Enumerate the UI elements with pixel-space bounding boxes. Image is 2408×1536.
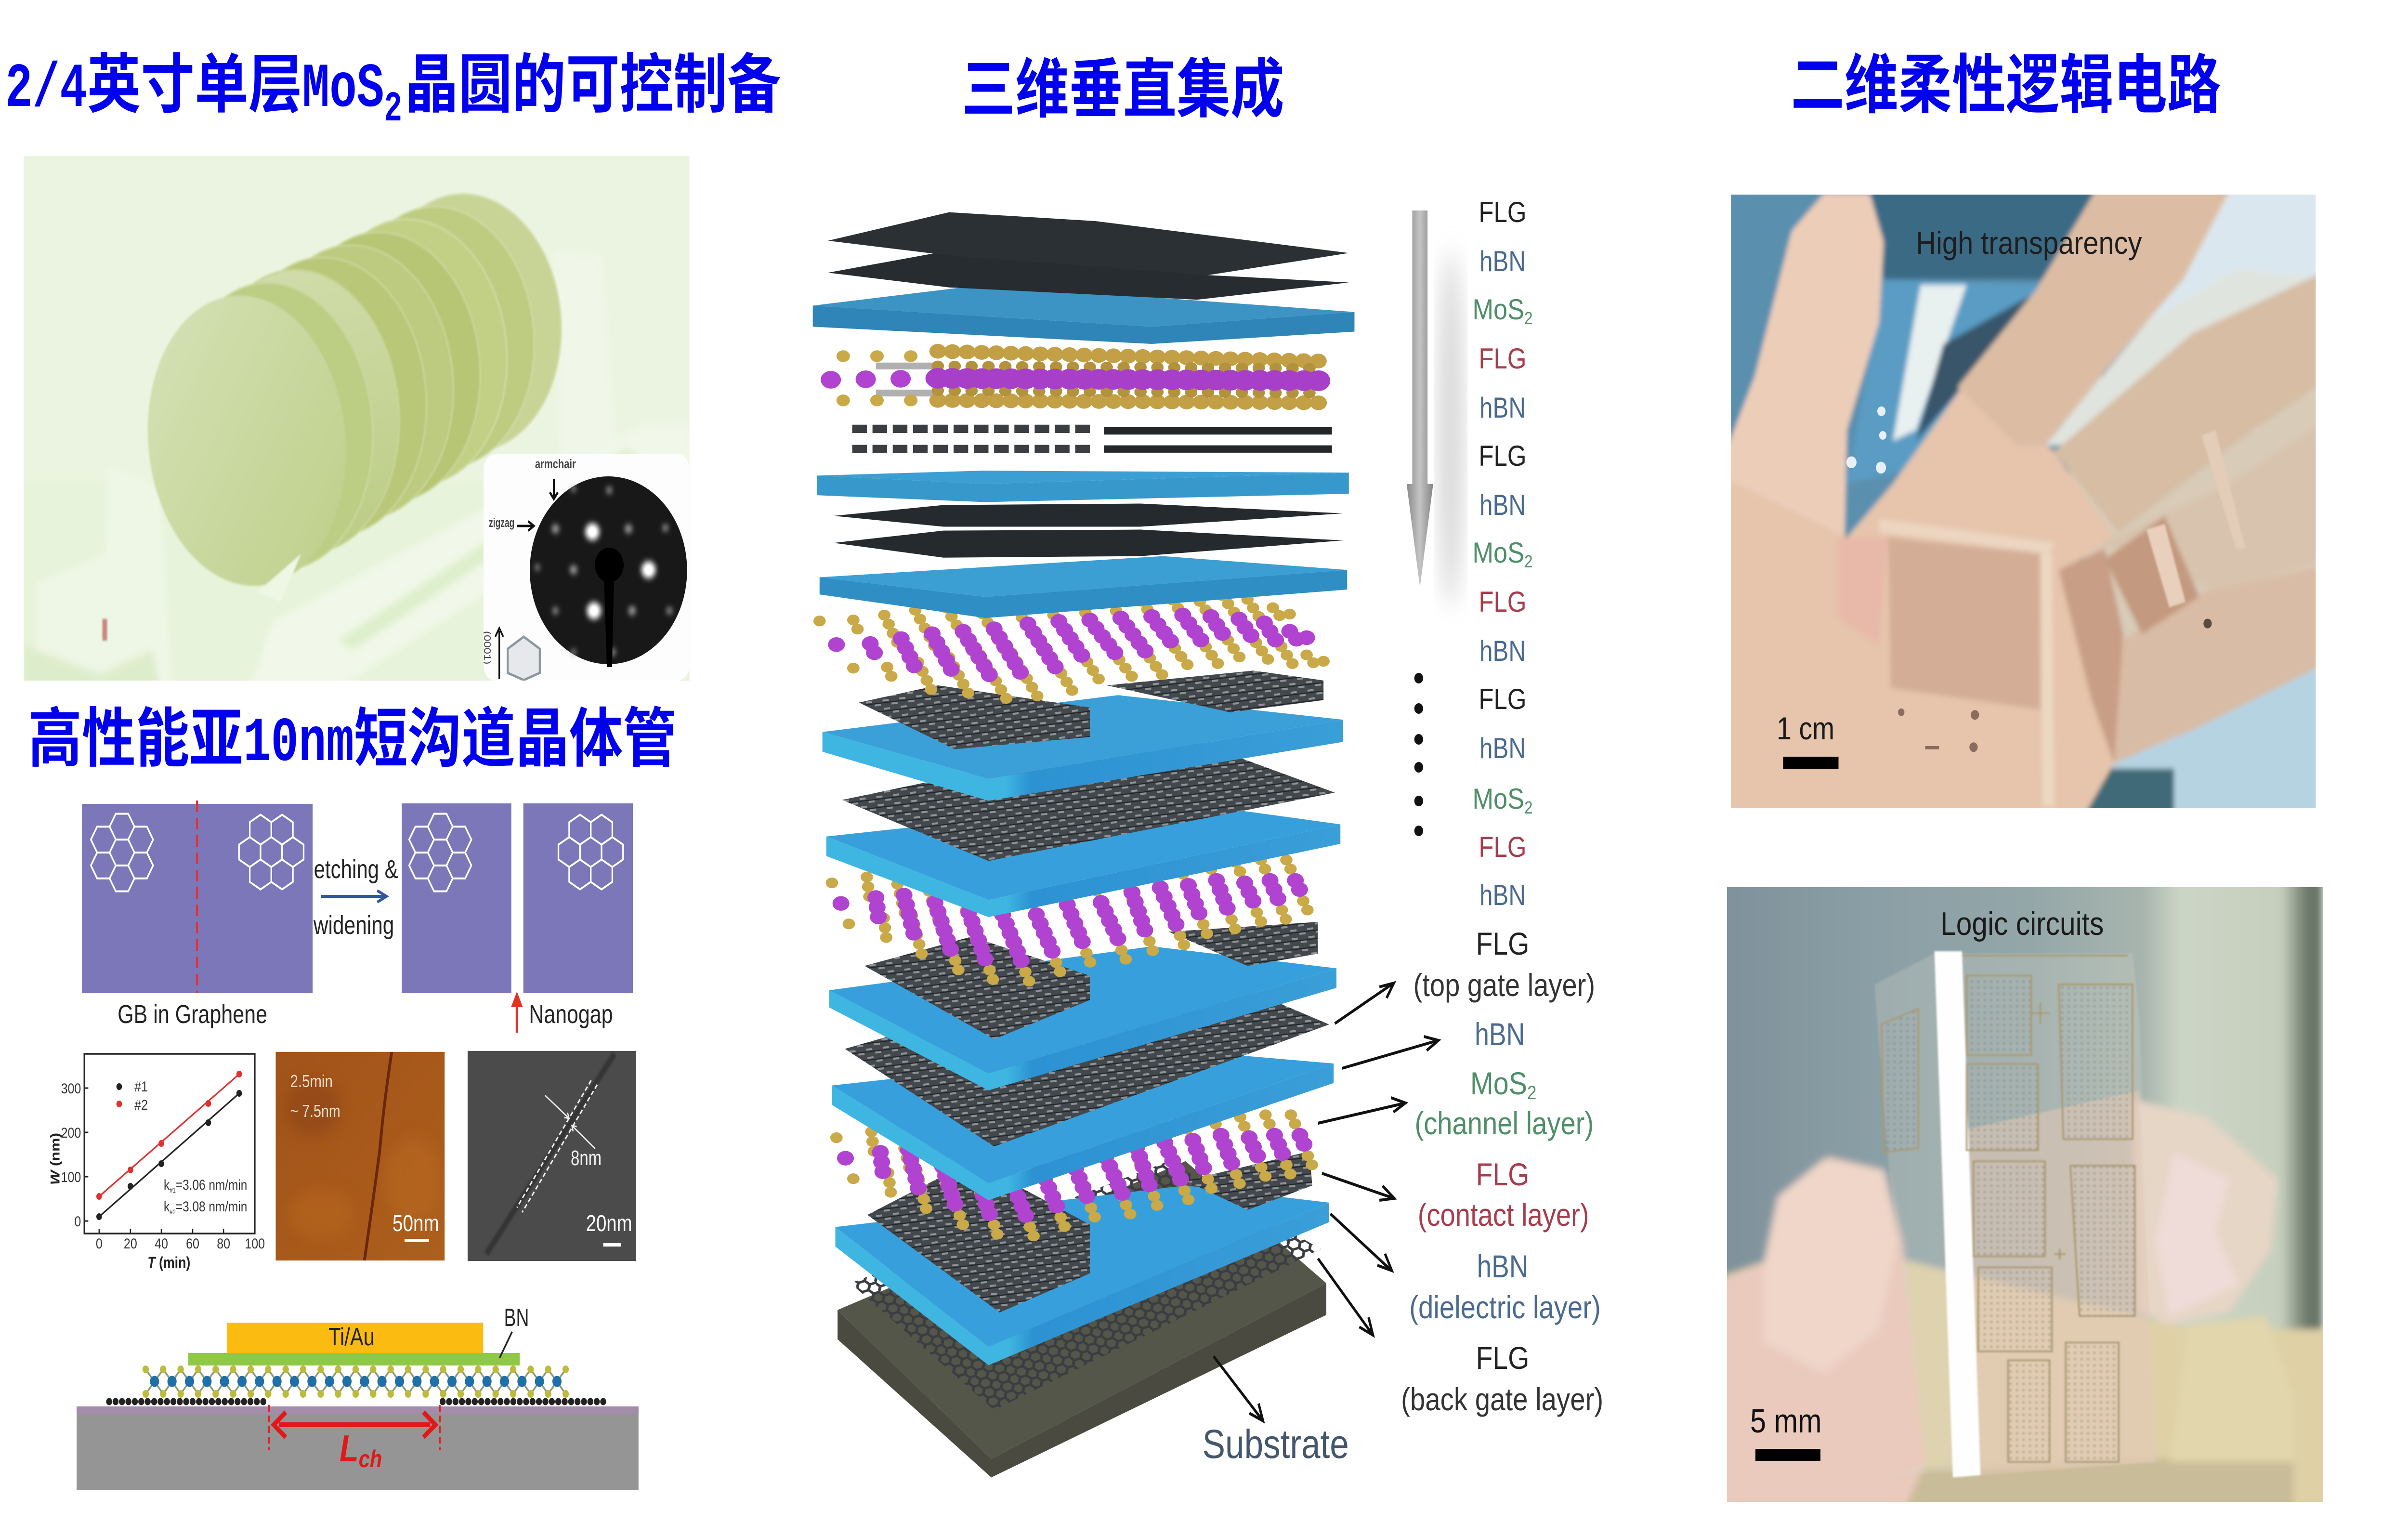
labels: layer functions: FLG: [1476, 1156, 1529, 1192]
labels: layer sequence: hBN: [1479, 879, 1526, 911]
labels: layer sequence: 2: [1524, 552, 1532, 572]
annotation: etch rates: k: [164, 1177, 170, 1193]
arrow: etching direction: [321, 891, 386, 902]
diagram: vertical stack upper half: [813, 212, 1354, 801]
MoS2 channel upper: [832, 860, 1309, 984]
inset: diffraction pattern: (0001): [482, 631, 493, 664]
scale: 1 cm: [1777, 710, 1839, 769]
annotation: etch rates: =3.06 nm/min: [176, 1177, 247, 1193]
graphene: contact pieces: [859, 670, 1323, 749]
graphene: top pair: [828, 212, 1349, 300]
plate: hBN upper: [826, 800, 1340, 917]
image: SEM of nanogap: 8nm: [571, 1146, 602, 1170]
substrate: [838, 1161, 1326, 1477]
chart: gap width vs etching time: 200: [61, 1125, 81, 1141]
chart: gap width vs etching time: 80: [217, 1235, 230, 1252]
chart: gap width vs etching time: [48, 1054, 265, 1272]
annotation: etch rates: [164, 1177, 247, 1216]
panel: nanogap left: [402, 803, 511, 993]
labels: layer sequence: 2: [1524, 798, 1532, 818]
graphene: thin pairs: [852, 429, 1332, 449]
labels: layer functions: [1401, 926, 1603, 1417]
title: short-channel transistor: 短沟道晶体管: [354, 686, 677, 780]
graphene: top gate: [845, 956, 1329, 1146]
title: wafer fabrication: 2/4: [5, 53, 87, 125]
legend: #1: [134, 1078, 148, 1095]
series: sample 2: [96, 1071, 242, 1200]
title: wafer fabrication: 英寸单层: [87, 32, 302, 126]
plate: hBN 3: [820, 556, 1347, 618]
annotation: etch rates: =3.08 nm/min: [176, 1198, 247, 1215]
marker: channel length: [269, 1405, 440, 1472]
labels: layer sequence: hBN: [1479, 392, 1526, 424]
title: wafer fabrication: MoS: [302, 53, 384, 125]
panel: GB in graphene: [82, 800, 314, 993]
photo: transparent device on hand: High transparency: [1916, 225, 2142, 261]
chart: gap width vs etching time: T (min): [147, 1254, 190, 1272]
image: AFM of nanogap: [275, 1052, 445, 1260]
graphene: contact lower: [867, 1151, 1312, 1313]
labels: layer functions: FLG: [1476, 1340, 1529, 1376]
labels: layer sequence: FLG: [1479, 440, 1527, 472]
labels: layer sequence: FLG: [1479, 196, 1527, 228]
photo: flexible logic circuits held in fingers: [1713, 874, 2330, 1515]
annotation: etch rates: #1: [170, 1186, 176, 1194]
inset: diffraction pattern: armchair: [535, 457, 576, 472]
graphene: between plates: [842, 732, 1335, 861]
series: sample 1: [96, 1090, 242, 1220]
title: 3D vertical integration: 三维垂直集成: [962, 37, 1284, 131]
chart: gap width vs etching time: 0: [96, 1235, 103, 1252]
annotation: etch rates: #2: [170, 1208, 176, 1216]
arrow: growth direction: [1407, 210, 1463, 607]
title: short-channel transistor: 高性能亚: [28, 686, 243, 780]
contact: graphene left: [109, 1398, 268, 1405]
labels: layer functions: (top gate layer): [1413, 967, 1595, 1003]
annotation: etch rates: k: [164, 1198, 170, 1215]
label: BN: [500, 1304, 529, 1358]
chart: gap width vs etching time: 300: [61, 1080, 81, 1097]
chart: gap width vs etching time: 100: [61, 1169, 81, 1185]
labels: layer sequence: hBN: [1479, 635, 1526, 667]
plate: hBN: [832, 1049, 1334, 1200]
labels: layer sequence: hBN: [1479, 489, 1526, 521]
labels: layer sequence: FLG: [1479, 831, 1527, 863]
labels: layer sequence: hBN: [1479, 245, 1526, 277]
marker: channel length: ch: [359, 1445, 382, 1472]
labels: layer sequence: FLG: [1479, 342, 1527, 375]
title: short-channel transistor: [28, 686, 677, 780]
plate: hBN 1: [813, 285, 1354, 344]
labels: layer functions: (dielectric layer): [1409, 1289, 1601, 1325]
labels: layer functions: hBN: [1477, 1248, 1528, 1284]
labels: layer functions: FLG: [1476, 926, 1529, 961]
graphene: back gate: [851, 1161, 1321, 1410]
image: SEM of nanogap: [468, 1051, 636, 1261]
continuation dots: [1414, 673, 1423, 836]
labels: layer functions: (channel layer): [1415, 1105, 1594, 1141]
scale: 1 cm: 1 cm: [1777, 710, 1834, 746]
labels: layer sequence: [1473, 196, 1532, 911]
chart: gap width vs etching time: 20: [124, 1235, 137, 1252]
labels: layer functions: (contact layer): [1418, 1197, 1589, 1233]
scale: 5 mm: [1750, 1402, 1822, 1461]
label: etching & widening: widening: [313, 910, 394, 940]
dielectric: BN: [188, 1353, 520, 1365]
marker: channel length: L: [340, 1428, 359, 1470]
photo: flexible logic circuits held in fingers: Logic circuits: [1940, 906, 2104, 942]
graphene: pair: [834, 504, 1343, 558]
label: Nanogap: Nanogap: [529, 999, 613, 1029]
labels: layer sequence: 2: [1524, 309, 1532, 328]
image: AFM of nanogap: ~ 7.5nm: [290, 1102, 340, 1121]
MoS2 channel lower: [837, 1115, 1313, 1239]
plate: dielectric hBN: [835, 1185, 1329, 1365]
gate: Ti/Au: [227, 1323, 483, 1353]
arrows: layer callouts: [1214, 983, 1439, 1421]
image: SEM of nanogap: 20nm: [586, 1211, 632, 1236]
gate: Ti/Au: Ti/Au: [328, 1323, 375, 1351]
chart: gap width vs etching time: 100: [245, 1235, 265, 1252]
image: AFM of nanogap: 50nm: [393, 1211, 439, 1236]
chart: gap width vs etching time: 40: [155, 1235, 168, 1252]
inset: diffraction pattern: [482, 454, 690, 681]
plate: top hBN: [829, 946, 1336, 1090]
title: flexible logic circuits: 二维柔性逻辑电路: [1791, 33, 2221, 126]
panel: nanogap right: [523, 800, 634, 993]
labels: layer sequence: MoS: [1473, 783, 1522, 815]
title: wafer fabrication: 晶圆的可控制备: [405, 32, 781, 126]
plate: hBN 2: [817, 471, 1349, 502]
scale: 5 mm: 5 mm: [1750, 1402, 1822, 1440]
labels: layer functions: (back gate layer): [1401, 1381, 1603, 1417]
diagram: transistor cross section: [77, 1304, 639, 1490]
diagram: vertical stack lower half: [826, 732, 1340, 1477]
channel: MoS2 atoms: [145, 1369, 568, 1394]
graphene: contact upper: [864, 922, 1318, 1039]
labels: layer functions: MoS: [1470, 1065, 1525, 1101]
label: Substrate: Substrate: [1203, 1422, 1349, 1467]
inset: diffraction pattern: zigzag: [489, 516, 514, 530]
chart: gap width vs etching time: 0: [74, 1213, 81, 1230]
photo: stack of MoS2 wafers: [12, 144, 702, 694]
label: etching & widening: etching &: [314, 854, 398, 884]
legend: #2: [134, 1097, 148, 1113]
MoS2 layer 2: [820, 591, 1325, 702]
label: etching & widening: [313, 854, 398, 940]
arrow: nanogap: [513, 995, 521, 1033]
title: wafer fabrication: 2: [384, 86, 402, 133]
labels: layer sequence: FLG: [1479, 586, 1527, 618]
labels: layer sequence: MoS: [1473, 293, 1522, 326]
labels: layer functions: 2: [1527, 1082, 1536, 1103]
title: short-channel transistor: 10nm: [243, 708, 354, 779]
labels: layer sequence: hBN: [1479, 732, 1526, 764]
image: AFM of nanogap: 2.5min: [290, 1072, 333, 1091]
labels: layer sequence: FLG: [1479, 683, 1527, 715]
plate: hBN 4: [823, 695, 1343, 801]
contact: graphene right: [443, 1398, 606, 1405]
label: BN: BN: [504, 1304, 529, 1332]
label: GB in Graphene: GB in Graphene: [118, 999, 267, 1029]
chart: gap width vs etching time: W (nm): [48, 1133, 63, 1185]
labels: layer functions: hBN: [1475, 1016, 1525, 1052]
legend: [117, 1078, 148, 1113]
MoS2 layer 1: [831, 351, 1321, 403]
labels: layer sequence: MoS: [1473, 537, 1522, 569]
photo: transparent device on hand: [1713, 183, 2330, 828]
diagram: graphene grain boundary etching: [82, 800, 634, 1033]
chart: gap width vs etching time: 60: [186, 1235, 199, 1252]
title: wafer fabrication: [5, 32, 781, 133]
substrate: [77, 1406, 639, 1490]
